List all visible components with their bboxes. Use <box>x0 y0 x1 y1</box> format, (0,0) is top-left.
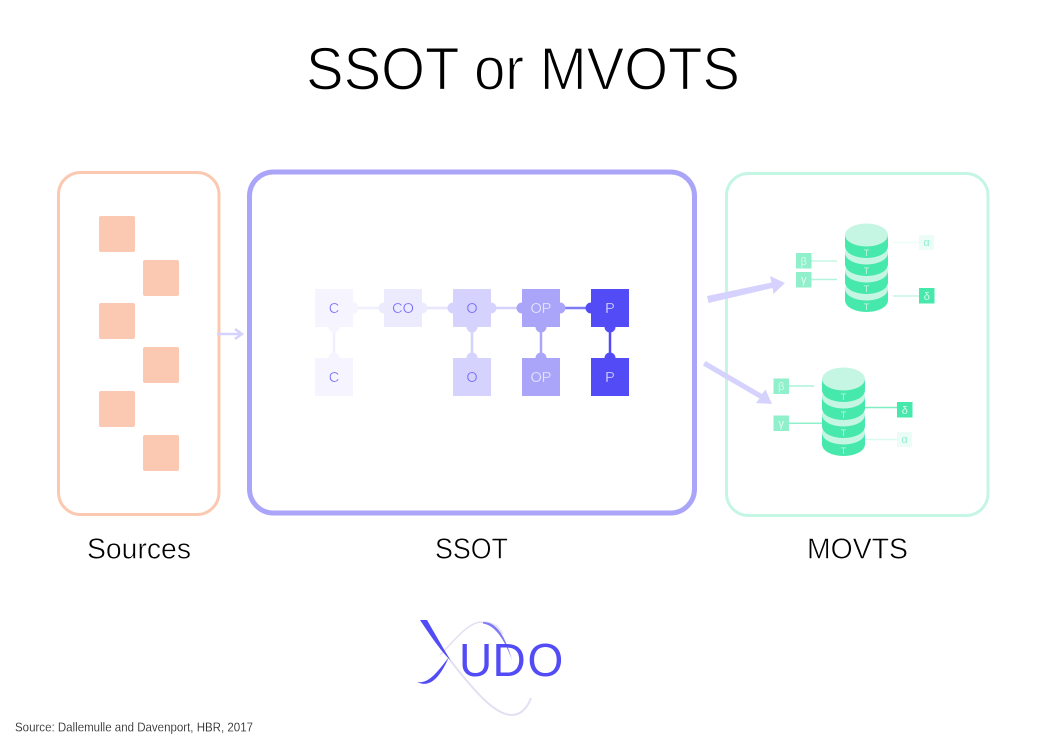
attribute tags <box>774 378 912 447</box>
attribute tags: α <box>901 434 908 446</box>
attribute tags: γ <box>779 418 785 430</box>
data blocks: O <box>466 370 478 386</box>
arrow: SSOT to lower database <box>703 361 772 404</box>
attribute tags: β <box>778 381 784 393</box>
data blocks: CO <box>392 301 414 317</box>
data blocks: O <box>466 301 478 317</box>
source note: Source: Dallemulle and Davenport, HBR, 2017 <box>15 720 253 734</box>
source blocks <box>99 216 179 471</box>
label: SSOT: SSOT <box>435 534 508 566</box>
data blocks: P <box>605 370 615 386</box>
connectors: lightest <box>328 302 453 364</box>
wordmark: UDO <box>459 634 563 686</box>
database: lower <box>774 368 912 456</box>
data blocks: OP <box>531 301 551 317</box>
panel: SSOT <box>250 172 694 513</box>
arrow: SSOT to upper database <box>707 276 785 303</box>
panel: MOVTS <box>726 174 988 516</box>
data blocks: OP <box>531 370 551 386</box>
data blocks <box>315 289 629 396</box>
cylinder: T <box>864 302 870 312</box>
data blocks: P <box>605 301 615 317</box>
attribute tags: δ <box>902 405 908 417</box>
arrow: sources to SSOT <box>217 329 242 339</box>
cylinder <box>845 224 888 312</box>
connectors: strong <box>516 302 591 364</box>
logo: Xudo <box>417 620 563 715</box>
cylinder: T <box>841 392 847 402</box>
cylinder: T <box>841 410 847 420</box>
connector lines <box>811 242 919 296</box>
attribute tags: β <box>801 256 807 268</box>
label: Sources: Sources <box>87 534 191 566</box>
blue swoosh <box>420 620 451 661</box>
title: SSOT or MVOTS <box>306 36 740 102</box>
attribute tags: δ <box>924 291 930 303</box>
connectors: darkest <box>586 302 616 364</box>
connectors: mid <box>448 302 522 364</box>
cylinder: T <box>864 284 870 294</box>
pale wave <box>440 622 503 655</box>
data blocks: C <box>329 370 339 386</box>
connector lines <box>789 386 897 440</box>
cylinder: T <box>864 266 870 276</box>
label: MOVTS: MOVTS <box>807 534 908 566</box>
attribute tags: α <box>923 237 930 249</box>
database: upper <box>796 224 934 312</box>
attribute tags <box>796 235 934 304</box>
cylinder: T <box>864 248 870 258</box>
cylinder <box>822 368 865 456</box>
attribute tags: γ <box>801 274 807 286</box>
data blocks: C <box>329 301 339 317</box>
panel: sources <box>58 172 219 514</box>
cylinder: T <box>841 446 847 456</box>
cylinder: T <box>841 428 847 438</box>
